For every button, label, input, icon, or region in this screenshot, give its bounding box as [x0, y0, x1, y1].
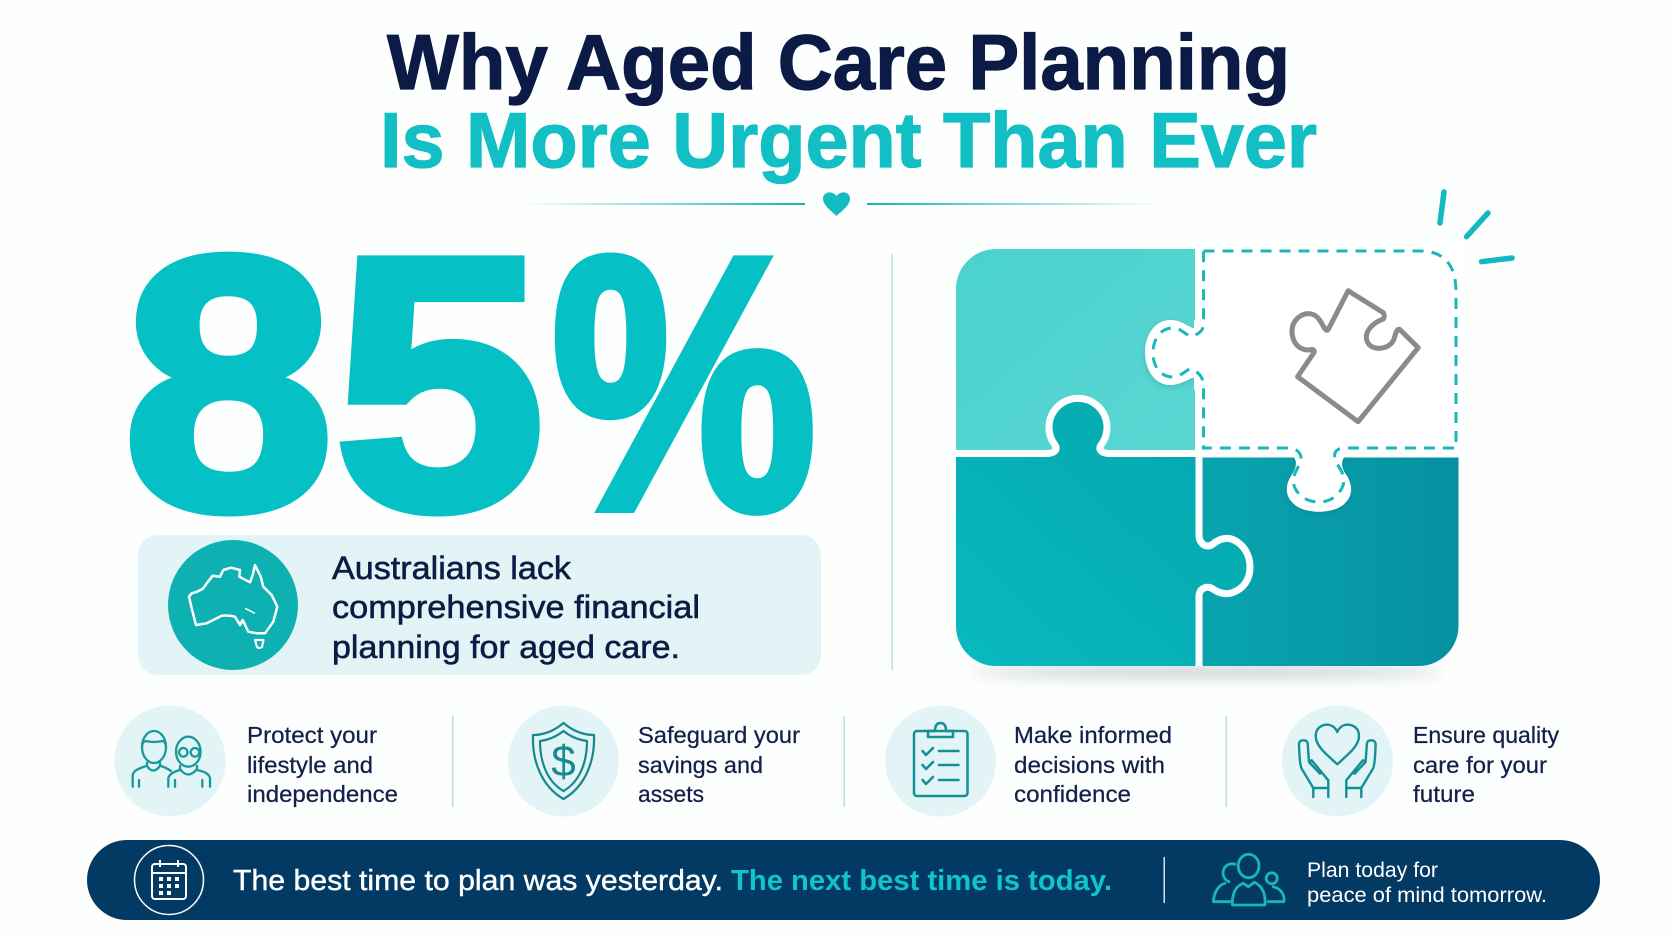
- text: care for your: [1413, 752, 1547, 778]
- benefit: savings: [508, 706, 800, 816]
- text: Safeguard your: [638, 722, 800, 748]
- text: assets: [638, 781, 704, 807]
- text: confidence: [1014, 781, 1131, 807]
- icon: calendar: [134, 846, 204, 914]
- icon: group of people: [1213, 854, 1284, 905]
- banner side text: peace of mind tomorrow.: [1307, 884, 1547, 907]
- banner side text: [1307, 859, 1547, 907]
- missing piece slot: [1145, 245, 1463, 512]
- text: decisions with: [1014, 752, 1165, 778]
- puzzle illustration: [956, 192, 1512, 677]
- piece: bottom left: [956, 398, 1250, 666]
- benefit: decisions: [885, 706, 1172, 816]
- text: future: [1413, 781, 1475, 807]
- icon: spark lines: [1440, 192, 1512, 262]
- caption text: comprehensive financial: [332, 589, 700, 625]
- benefit: quality care: [1282, 706, 1559, 816]
- statistic caption panel: [138, 535, 821, 675]
- big statistic 85%: 85: [123, 183, 545, 585]
- text: lifestyle and: [247, 752, 373, 778]
- icon: shield with dollar: $: [551, 737, 576, 786]
- banner message: The best time to plan was yesterday.: [233, 865, 723, 897]
- icon: shield with dollar: [533, 723, 594, 799]
- vertical divider between stat and puzzle: [892, 254, 893, 670]
- caption text: planning for aged care.: [332, 629, 680, 665]
- bottom banner: [87, 840, 1600, 920]
- icon: Australia map: [168, 540, 298, 670]
- big statistic 85%: %: [552, 183, 816, 585]
- title: [380, 18, 1317, 184]
- text: Protect your: [247, 722, 377, 748]
- caption text: [332, 550, 700, 665]
- text: Ensure quality: [1413, 722, 1559, 748]
- title divider with heart: [522, 192, 1162, 216]
- text: [247, 722, 398, 807]
- text: savings and: [638, 752, 763, 778]
- title: Is More Urgent Than Ever: [380, 96, 1317, 184]
- banner message: The next best time is today.: [731, 865, 1112, 897]
- text: [1413, 722, 1559, 807]
- icon: loose puzzle piece: [1292, 291, 1418, 422]
- text: Make informed: [1014, 722, 1172, 748]
- text: [638, 722, 800, 807]
- text: independence: [247, 781, 398, 807]
- icon: hands holding heart: [1299, 725, 1376, 797]
- title: Why Aged Care Planning: [387, 18, 1290, 106]
- banner message: [233, 865, 1112, 897]
- caption text: Australians lack: [332, 550, 572, 586]
- banner side text: Plan today for: [1307, 859, 1438, 882]
- text: [1014, 722, 1172, 807]
- icon: clipboard checklist: [914, 723, 968, 796]
- benefit: lifestyle: [114, 706, 398, 816]
- icon: two people: [133, 731, 210, 787]
